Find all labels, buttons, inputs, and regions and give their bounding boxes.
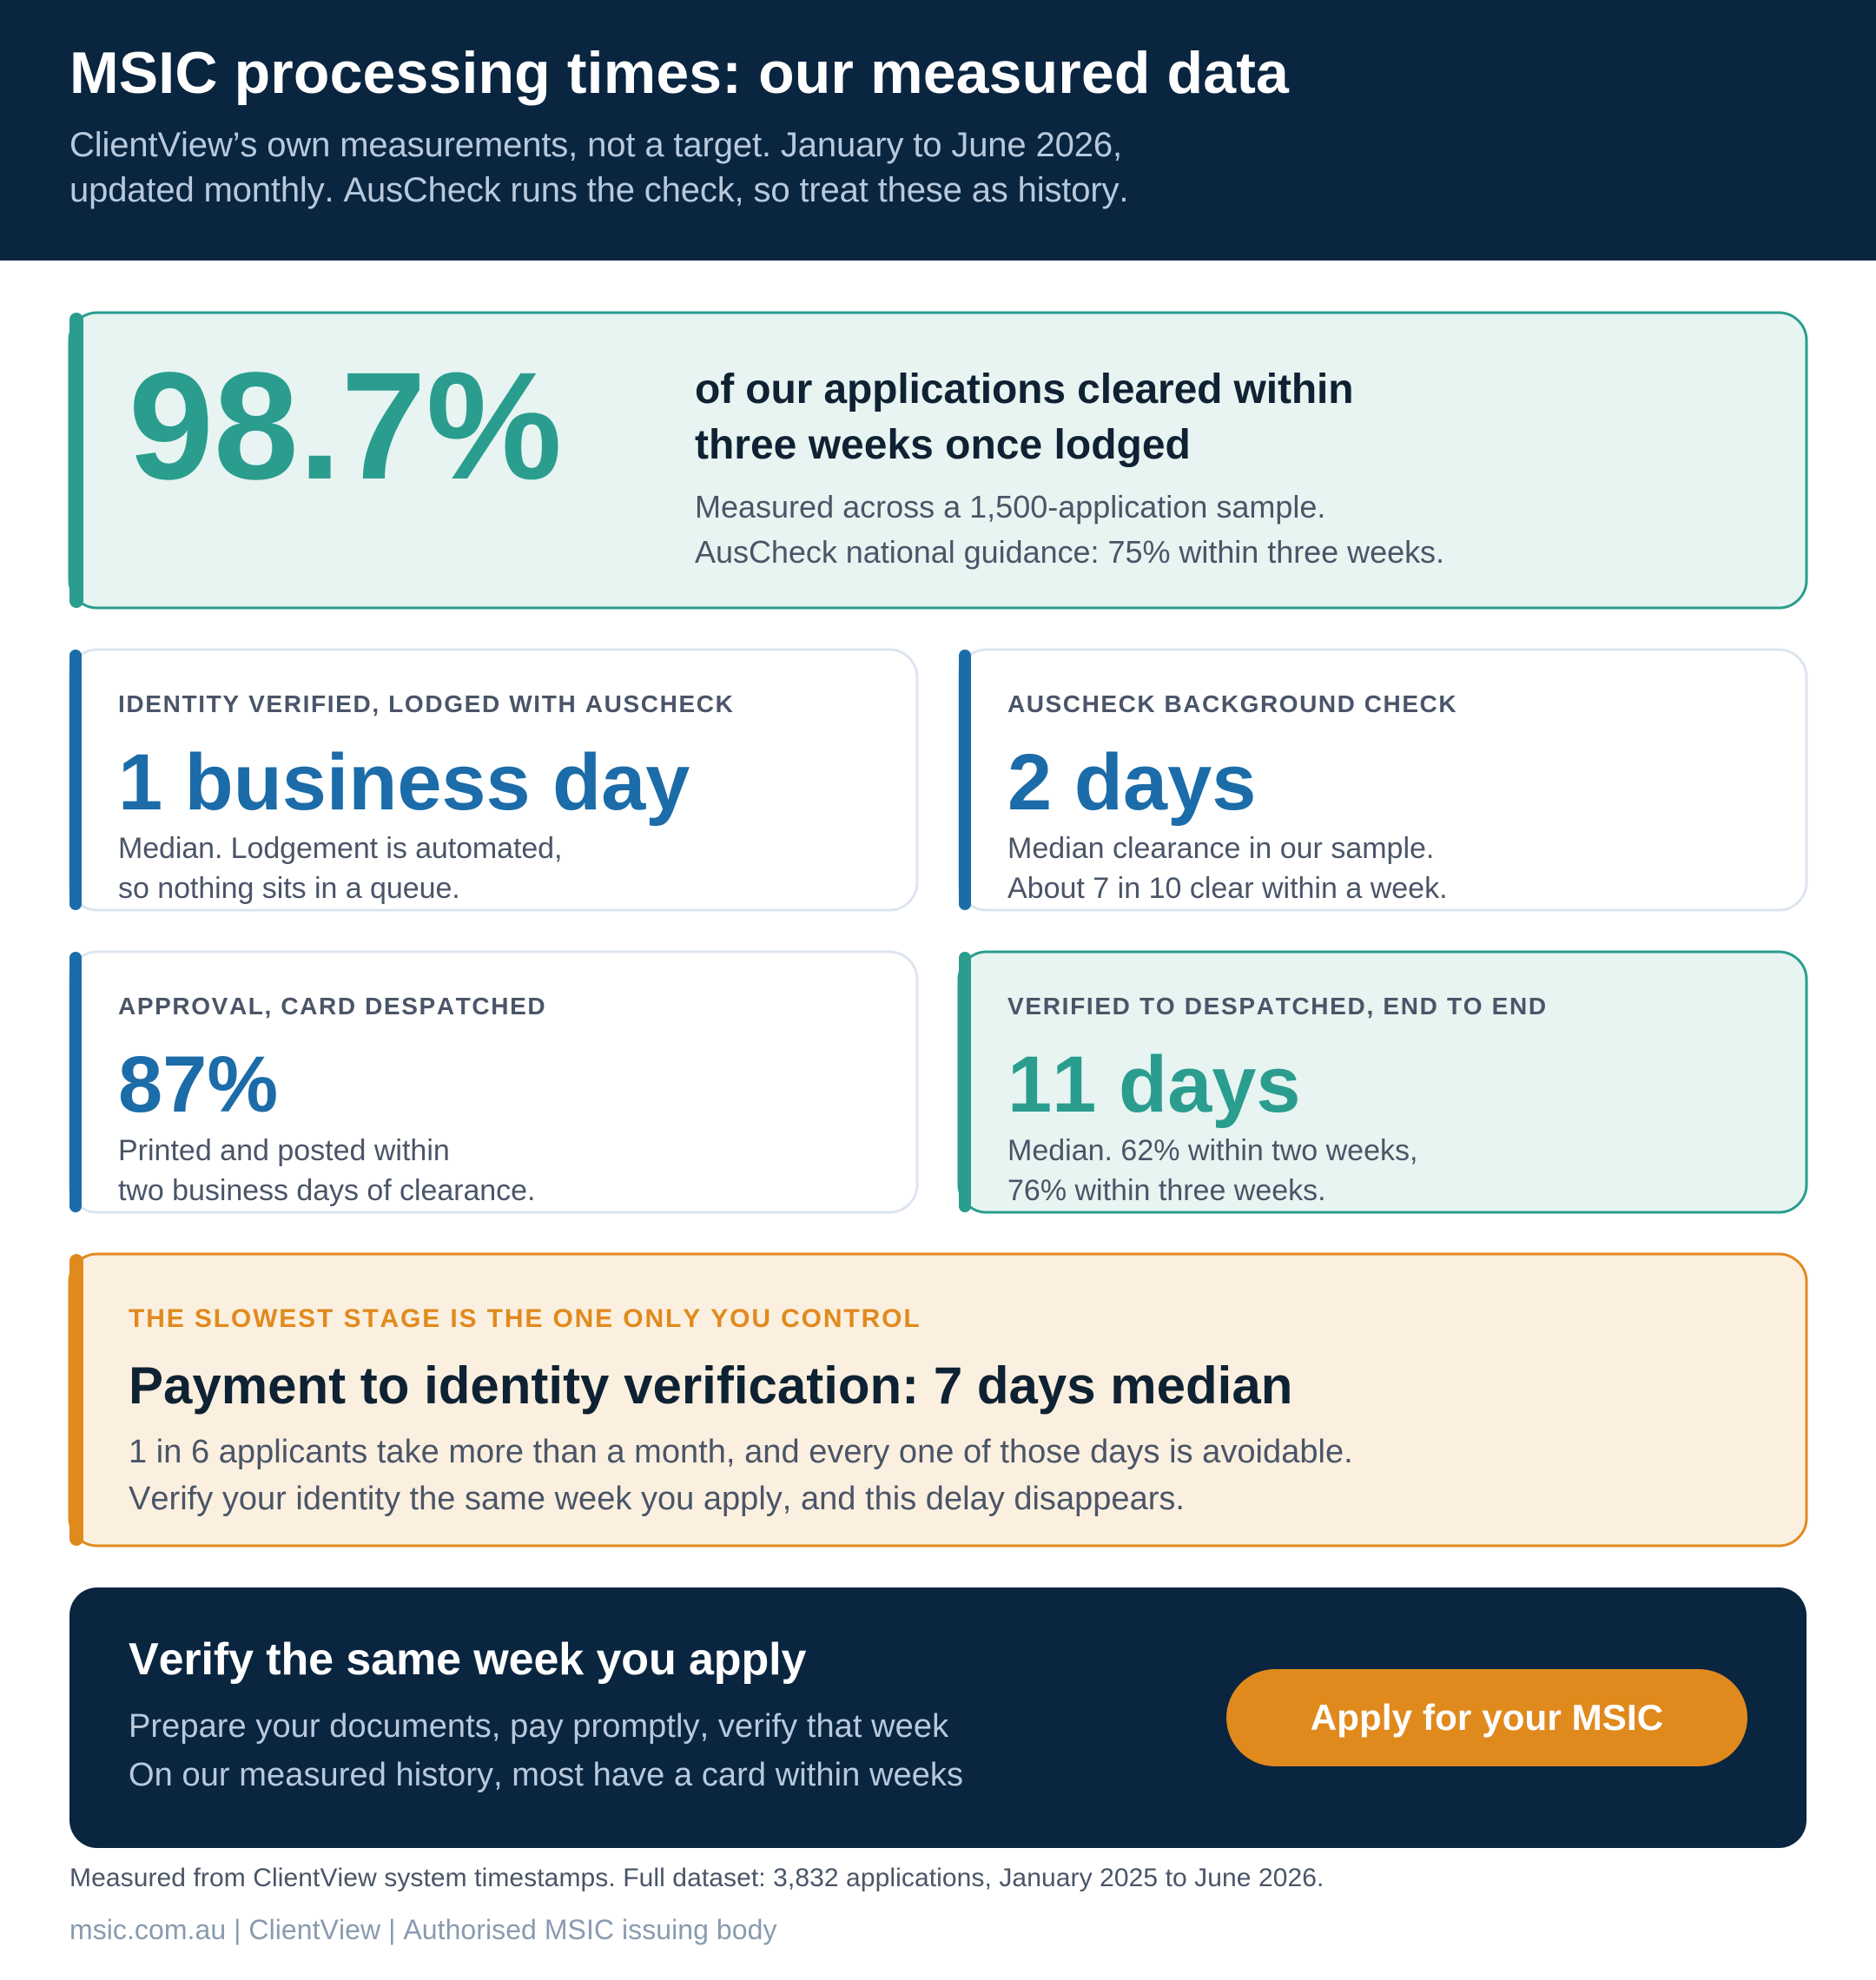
header band [0,0,1876,261]
hero headline: of our applications cleared within [695,366,1353,412]
panel: identity verified: Median. Lodgement is automated, [118,832,562,865]
panel: identity verified: 1 business day [118,738,690,827]
panel: call to action [69,1587,1807,1848]
panel: identity verified [68,648,919,912]
cta text line 2: On our measured history, most have a card within weeks [129,1757,963,1793]
hero detail line 2: AusCheck national guidance: 75% within three weeks. [695,534,1444,570]
footnote: Measured from ClientView system timestamps. Full dataset: 3,832 applications, January 2025 to June 2026. [69,1864,1324,1892]
source line: msic.com.au | ClientView | Authorised MSIC issuing body [69,1914,777,1945]
panel: approval [68,950,919,1214]
panel: end to end: 11 days [1007,1040,1301,1129]
cta heading: Verify the same week you apply [129,1634,806,1685]
panel: end to end: 76% within three weeks. [1007,1174,1326,1207]
panel: background check [957,648,1808,912]
panel: approval: APPROVAL, CARD DESPATCHED [118,993,546,1020]
panel: end to end: Median. 62% within two weeks, [1007,1134,1417,1167]
panel: background check: Median clearance in our sample. [1007,832,1434,865]
callout heading: Payment to identity verification: 7 days median [129,1356,1292,1415]
panel: background check: 2 days [1007,738,1256,827]
panel: background check: AUSCHECK BACKGROUND CHECK [1007,690,1457,717]
subtitle line 2: updated monthly. AusCheck runs the check, so treat these as history. [69,171,1128,209]
panel: end to end [957,950,1808,1214]
panel: identity verified: IDENTITY VERIFIED, LODGED WITH AUSCHECK [118,690,735,717]
panel: end to end: VERIFIED TO DESPATCHED, END TO END [1007,993,1548,1020]
hero headline line 2: three weeks once lodged [695,422,1191,468]
title: MSIC processing times: our measured data [69,40,1289,106]
panel: background check: About 7 in 10 clear within a week. [1007,872,1448,905]
cta text: Prepare your documents, pay promptly, verify that week [129,1708,948,1745]
panel: approval: Printed and posted within [118,1134,450,1167]
panel: hero stat [68,311,1808,610]
subtitle: ClientView’s own measurements, not a target. January to June 2026, [69,126,1122,164]
callout label: THE SLOWEST STAGE IS THE ONE ONLY YOU CONTROL [129,1304,921,1333]
button: Apply for your MSIC [1311,1697,1663,1738]
callout text line 2: Verify your identity the same week you apply, and this delay disappears. [129,1481,1185,1517]
callout text: 1 in 6 applicants take more than a month, and every one of those days is avoidable. [129,1434,1353,1470]
panel: identity verified: so nothing sits in a queue. [118,872,460,905]
panel: approval: two business days of clearance. [118,1174,535,1207]
hero detail: Measured across a 1,500-application sample. [695,489,1325,525]
button [1226,1669,1747,1766]
hero number: 98.7% [129,341,562,512]
panel: approval: 87% [118,1040,278,1129]
panel: slowest stage callout [68,1252,1808,1548]
